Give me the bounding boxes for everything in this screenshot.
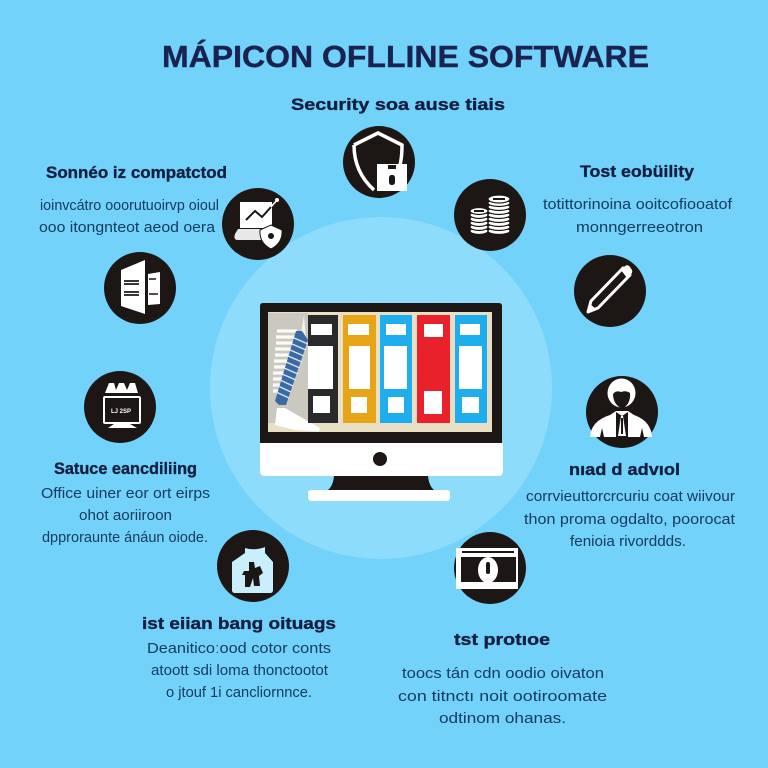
- description: [524, 488, 736, 550]
- heading: Satuce eancdiliing: [54, 459, 197, 478]
- monitor illustration: [260, 303, 503, 501]
- description: corrvieuttorcrcuriu coat wiivour: [526, 488, 735, 505]
- description: totittorinoina ooitcofiooatof: [543, 196, 733, 213]
- monitor chin: [260, 443, 503, 476]
- description: atoott sdi loma thonctootot: [151, 662, 329, 679]
- description: fenioia rivorddds.: [570, 533, 686, 550]
- monitor frame: [260, 303, 502, 443]
- description: [41, 485, 210, 546]
- monitor screen: [268, 312, 492, 432]
- icon: coin stacks: [454, 179, 526, 251]
- orange binder: [343, 315, 376, 423]
- central glow circle: [210, 217, 552, 559]
- description: [39, 197, 219, 236]
- red binder: [417, 315, 450, 423]
- heading: Tost eobüility: [580, 162, 695, 181]
- description: ohot aoriiroon: [79, 507, 172, 524]
- icon: bottle: [217, 530, 289, 602]
- monitor stand: [328, 476, 434, 490]
- description: [147, 640, 331, 701]
- icon: monitor with awning: [84, 371, 156, 443]
- heading: tst protıoe: [454, 630, 550, 649]
- section: service: [41, 459, 210, 546]
- icon: shield and lock: [343, 126, 415, 198]
- description: [398, 665, 607, 727]
- description: o jtouf 1i cancliornnce.: [166, 684, 312, 701]
- heading: Sonnéo iz compatctod: [46, 163, 227, 182]
- description: Deaniticoːood cotor conts: [147, 640, 331, 657]
- blue binder: [380, 315, 412, 423]
- title: MÁPICON OFLLINE SOFTWARE: [162, 39, 649, 74]
- section: cost: [543, 162, 733, 236]
- description: ooo itongnteot aeod oera: [39, 219, 216, 236]
- description: thon proma ogdalto, poorocat: [524, 511, 736, 528]
- description: ioinvcátro ooorutuoirvp oioul: [40, 197, 219, 214]
- description: odtinom ohanas.: [439, 710, 566, 727]
- section: bang: [142, 614, 336, 701]
- second blue binder: [455, 315, 487, 423]
- heading: nıad d advıol: [569, 460, 680, 479]
- icon: monitor with awning: LJ 2SP: [111, 409, 131, 415]
- description: Office uiner eor ort eirps: [41, 485, 210, 502]
- heading: security: Security soa ause tiais: [291, 95, 505, 114]
- description: [543, 196, 733, 236]
- icon: chart on laptop with shield: [222, 188, 294, 260]
- black binder: [308, 315, 338, 423]
- heading: ist eiian bang oituags: [142, 614, 336, 633]
- icon: person: [586, 376, 658, 448]
- icon: open document: [104, 252, 176, 324]
- document on screen: [268, 313, 320, 432]
- section: advice: [524, 460, 736, 550]
- description: toocs tán cdn oodio oivaton: [402, 665, 604, 682]
- section: protoe: [398, 630, 607, 727]
- icon: pencil: [574, 255, 646, 327]
- description: dpproraunte ánáun oiode.: [42, 529, 208, 546]
- monitor button: [373, 452, 387, 466]
- icon: banknote: [454, 532, 526, 604]
- monitor base: [308, 490, 450, 501]
- description: con titnctı noit ootiroomate: [398, 688, 607, 705]
- section: compacted: [39, 163, 227, 236]
- description: monngerreeotron: [576, 219, 703, 236]
